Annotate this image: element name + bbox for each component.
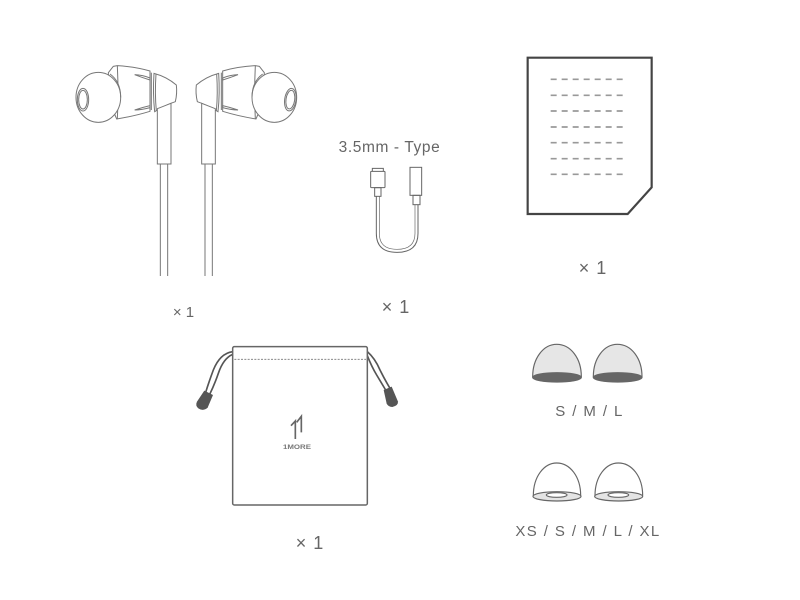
clear ear tip left	[533, 463, 581, 501]
icon: grey ear tips	[533, 344, 642, 382]
clear ear tip right	[595, 463, 643, 501]
logo mark	[291, 416, 301, 439]
left drawstring	[196, 352, 233, 410]
icon: earphones	[76, 66, 298, 276]
icon: clear ear tips	[533, 463, 643, 501]
grey tips size label: S / M / L	[555, 403, 624, 420]
grey ear tip right	[593, 344, 642, 382]
icon: left earphone	[76, 66, 177, 276]
adapter quantity label: × 1	[382, 297, 410, 317]
manual quantity label: × 1	[579, 258, 607, 278]
icon: right earphone	[196, 66, 298, 276]
pouch body	[233, 347, 367, 505]
icon: carrying pouch	[196, 347, 398, 505]
icon: manual document	[528, 58, 652, 214]
logo wordmark: 1MORE	[283, 444, 312, 451]
pouch stitching	[234, 358, 366, 361]
grey ear tip left	[533, 344, 581, 382]
right drawstring	[367, 352, 398, 407]
icon: adapter cable	[371, 167, 422, 252]
adapter heading: 3.5mm - Type	[339, 139, 440, 156]
manual text lines	[551, 79, 623, 174]
pouch quantity label: × 1	[296, 533, 324, 553]
earphones quantity label: × 1	[173, 304, 194, 321]
clear tips size label: XS / S / M / L / XL	[515, 523, 661, 540]
